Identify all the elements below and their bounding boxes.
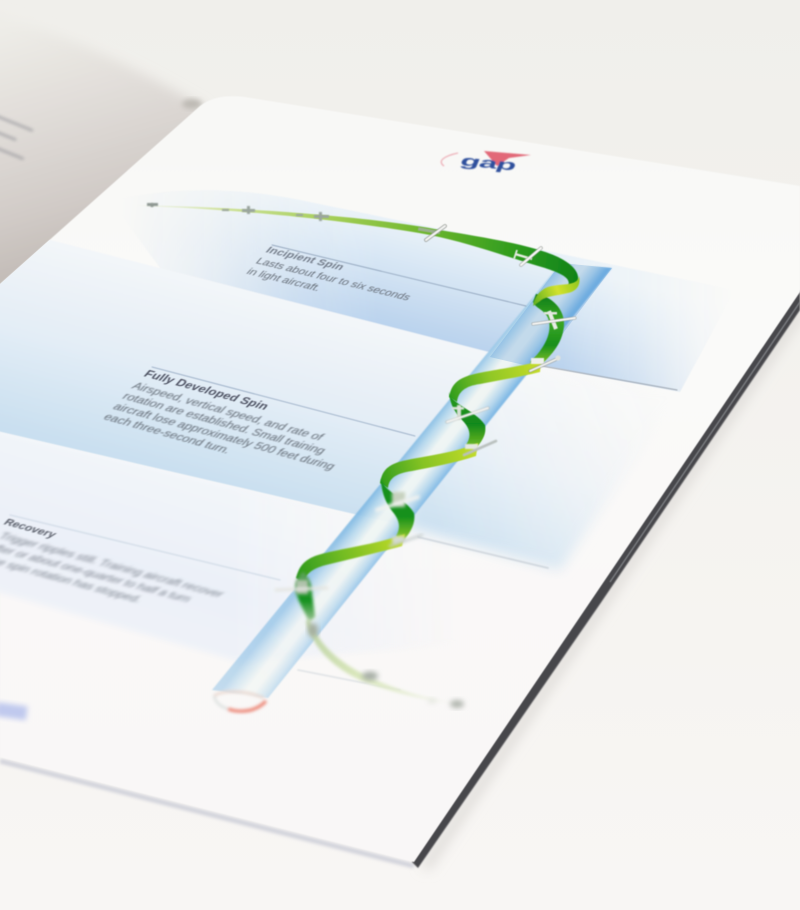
icon: plane 6: [533, 311, 575, 329]
ribbon: second helix turn: [380, 392, 485, 488]
text block: fully developed description: [100, 380, 358, 483]
icon: blurred blue footer logo: [0, 702, 28, 720]
heading: Fully Developed Spin: Fully Developed Spin: [141, 368, 272, 412]
icon: plane 7: [530, 355, 561, 371]
page edge: dark right paper stack: [412, 290, 800, 868]
shadow: gutter between pages: [182, 99, 202, 109]
icon: plane 2: [222, 206, 255, 214]
icon: plane 8: [447, 405, 488, 422]
ribbon: first helix turn: [449, 276, 580, 402]
text block: fully developed description: rotation are established. Small training: [119, 390, 329, 457]
panel: left facing page: [0, 8, 205, 320]
text block: recovery description: Trigger ripples still. Training aircraft recover: [0, 530, 227, 600]
icon: plane 13: [308, 623, 318, 637]
ribbon: approach tapering into the spin: [135, 205, 578, 286]
text block: incipient description: Lasts about four to six seconds: [253, 256, 413, 303]
ribbon: third helix turn: [296, 478, 414, 583]
panel: middle blue band fully developed spin: [0, 240, 426, 514]
rules: leader lines: [10, 245, 677, 690]
panel: lower pale band recovery: [0, 435, 328, 659]
panel: upper blue band incipient spin: [158, 192, 698, 392]
panel: middle blue band right side fade: [410, 399, 609, 572]
icon: gap logo: [441, 151, 531, 174]
icon: plane 10: [377, 492, 418, 510]
text block: blurred left page text: [0, 115, 33, 160]
icon: plane 3: [296, 212, 329, 221]
text block: incipient description: in light aircraft.: [244, 267, 324, 294]
icon: plane 14: [362, 672, 378, 680]
icon: plane 9: [464, 441, 496, 455]
ribbon: recovery tail: [306, 618, 458, 704]
icon: plane 15: [428, 699, 464, 708]
icon: plane 11: [390, 535, 422, 546]
icon: plane 5: [514, 248, 541, 265]
heading: Incipient Spin: Incipient Spin: [263, 245, 347, 273]
page edge: bottom pale edge: [0, 761, 414, 866]
icon: gap logo: gap: [458, 152, 519, 174]
tube shade above divider: [490, 263, 612, 368]
icon: plane 1 far: [147, 203, 158, 207]
text block: fully developed description: each three-second turn.: [100, 411, 234, 456]
ring: red ellipse at tube base: [214, 692, 266, 711]
ribbon: fourth turn: [295, 572, 315, 622]
column: vertical tube: [212, 263, 612, 698]
icon: plane 12: [276, 580, 327, 594]
shadow: soft cast shadow right of brochure: [425, 312, 800, 868]
heading: Recovery: Recovery: [1, 517, 59, 540]
text block: fully developed description: aircraft lose approximately 500 feet during: [110, 401, 339, 472]
icon: plane 4: [418, 226, 445, 240]
text block: fully developed description: Airspeed, vertical speed, and rate of: [129, 380, 327, 443]
